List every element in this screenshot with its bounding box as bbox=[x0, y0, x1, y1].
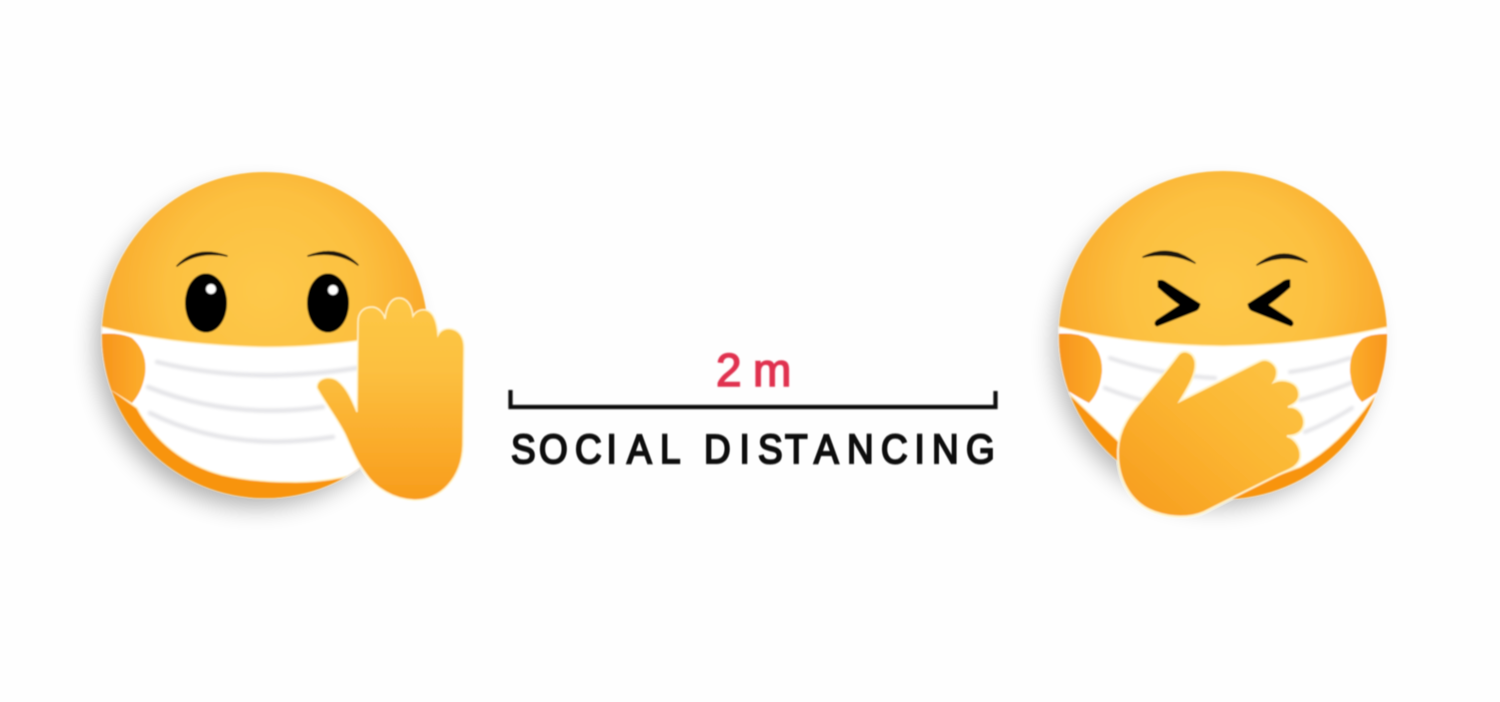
caption: social distancing: SOCIAL DISTANCING bbox=[511, 427, 995, 472]
emoji: masked face coughing into hand bbox=[1050, 171, 1400, 516]
hand: raised palm bbox=[317, 298, 464, 500]
squeezed eyes: right face bbox=[1155, 280, 1293, 326]
right face lower rim bbox=[1070, 398, 1374, 500]
eyes: left face bbox=[185, 274, 349, 332]
eyebrows: left face bbox=[177, 252, 358, 266]
measurement label: 2 m: 2 m bbox=[0, 344, 791, 396]
face: left bbox=[102, 172, 428, 498]
left face lower rim bbox=[112, 391, 342, 499]
face mask: right bbox=[1058, 325, 1388, 477]
mask pleats bbox=[1105, 358, 1358, 432]
cheek: right side bbox=[1350, 334, 1392, 402]
eyebrows: right face bbox=[1143, 251, 1307, 265]
infographic canvas bbox=[82, 170, 1388, 520]
cheek: left side bbox=[1055, 334, 1102, 403]
hand: covering mouth bbox=[1118, 352, 1304, 516]
face mask: left bbox=[100, 325, 361, 484]
cheek: left face bbox=[98, 334, 145, 403]
mask pleats bbox=[148, 362, 357, 442]
emoji: masked face with raised hand bbox=[95, 172, 464, 510]
distance bracket bbox=[510, 390, 996, 407]
face: right bbox=[1059, 171, 1387, 499]
